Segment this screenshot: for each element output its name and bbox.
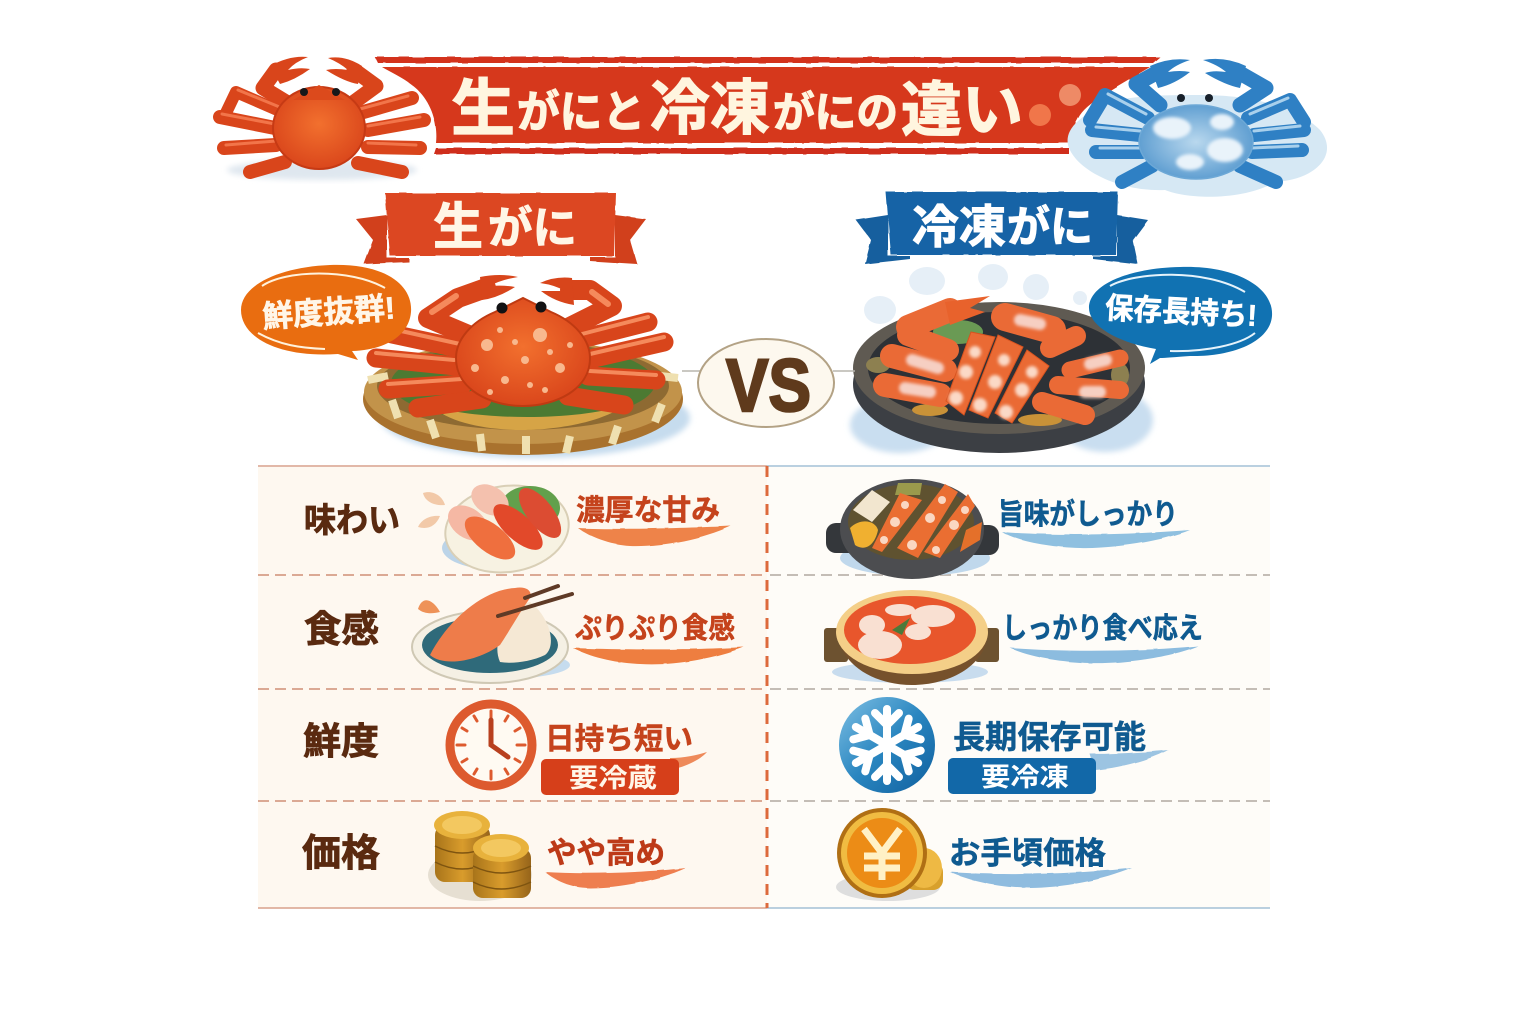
left ribbon heading bbox=[356, 193, 646, 264]
right column background bbox=[767, 467, 1270, 908]
dish handles bbox=[824, 628, 999, 662]
ribbon text bbox=[433, 199, 577, 255]
crab leg pieces bbox=[872, 484, 975, 558]
row 3 left value bbox=[541, 723, 707, 795]
value text: しっかり食べ応え bbox=[1002, 612, 1203, 645]
ribbon body bbox=[886, 192, 1118, 255]
bubble shape bbox=[241, 265, 411, 360]
yen symbol bbox=[864, 829, 900, 880]
plate shadow bbox=[850, 388, 1153, 453]
frost speckle bbox=[880, 496, 969, 554]
brush stroke bbox=[578, 526, 731, 546]
badge oval bbox=[698, 339, 834, 427]
row labels: 鮮度 bbox=[303, 721, 379, 762]
red crab legs and claws bbox=[220, 70, 424, 172]
value text: 濃厚な甘み bbox=[576, 494, 720, 527]
row 1 left: crab sashimi plate bbox=[418, 478, 574, 580]
value text: 旨味がしっかり bbox=[998, 497, 1178, 531]
back stack bbox=[434, 811, 490, 882]
ribbon text: がに bbox=[488, 204, 577, 253]
row 4 left: gold coin stacks bbox=[428, 811, 532, 901]
rice bbox=[497, 602, 551, 663]
white crab meat bbox=[858, 604, 955, 659]
tag text: 要冷蔵 bbox=[569, 763, 657, 793]
ribbon text: 生 bbox=[433, 199, 483, 255]
comparison table bbox=[258, 466, 1270, 908]
bubble shape bbox=[1089, 267, 1272, 364]
gratin surface bbox=[844, 596, 976, 664]
row labels: 価格 bbox=[302, 833, 380, 875]
row 1 right value bbox=[998, 497, 1190, 548]
tag text: 要冷凍 bbox=[981, 762, 1069, 792]
left column background bbox=[258, 467, 767, 908]
plate bbox=[412, 611, 568, 683]
red crab pincers bbox=[270, 57, 310, 84]
steam clouds bbox=[864, 264, 1087, 324]
title text: 生 bbox=[451, 75, 515, 144]
stone plate bbox=[853, 302, 1145, 453]
claw tips bbox=[945, 296, 990, 325]
frost blob bbox=[1068, 95, 1327, 197]
VS badge bbox=[682, 339, 855, 427]
snowflake arms bbox=[850, 709, 924, 781]
blue crab shell bbox=[1139, 105, 1253, 179]
pot handles bbox=[826, 523, 999, 555]
row 4 left value bbox=[545, 837, 686, 888]
claw pieces bbox=[885, 310, 1120, 415]
right hero: frozen crab on stone plate bbox=[850, 264, 1153, 453]
yen coin bbox=[837, 808, 927, 898]
herb garnish bbox=[892, 618, 910, 635]
row 4 right: yen coin icon bbox=[836, 808, 943, 901]
ribbon text: がに bbox=[1007, 204, 1093, 252]
plate glaze bbox=[422, 617, 558, 673]
plate shadow bbox=[442, 526, 554, 570]
banner ribbon bbox=[375, 57, 1160, 154]
crab meat bbox=[430, 587, 531, 662]
frost patches on legs bbox=[949, 346, 1038, 419]
frozen tag bbox=[948, 758, 1096, 794]
pot body bbox=[840, 479, 984, 579]
title text: 違い bbox=[901, 77, 1023, 144]
row 3 right: snowflake icon bbox=[839, 697, 935, 793]
green leaves and garnish bbox=[391, 343, 655, 423]
title text bbox=[451, 75, 1023, 144]
brush stroke bbox=[545, 868, 686, 888]
blue crab eyes bbox=[1177, 94, 1213, 102]
vegetables under the crab bbox=[866, 320, 1129, 426]
ribbon tails bbox=[356, 215, 646, 264]
red crab shadow bbox=[227, 160, 417, 180]
red crab shell bbox=[273, 87, 365, 169]
row labels bbox=[302, 502, 400, 875]
wooden side bbox=[838, 630, 988, 685]
coin shadow bbox=[836, 873, 940, 901]
clock ticks bbox=[457, 711, 525, 779]
icon: red crab bbox=[220, 57, 424, 180]
chopsticks bbox=[498, 586, 572, 616]
crab legs bbox=[376, 288, 664, 408]
refrigeration tag bbox=[541, 759, 679, 795]
table rules bbox=[258, 466, 1270, 908]
banner decoration dots bbox=[1029, 84, 1081, 126]
value text: やや高め bbox=[547, 837, 665, 870]
clock face bbox=[450, 704, 532, 786]
pot interior bbox=[848, 484, 974, 560]
icon: frozen blue crab bbox=[1068, 59, 1327, 197]
bamboo basket bbox=[363, 340, 683, 455]
VS text: VS bbox=[726, 344, 811, 427]
row 4 right value bbox=[949, 836, 1132, 888]
callout: freshness speech bubble bbox=[241, 265, 411, 360]
golden bed bbox=[430, 405, 625, 430]
brush stroke bbox=[670, 752, 707, 770]
brush stroke bbox=[1090, 750, 1168, 770]
value text: 長期保存可能 bbox=[953, 719, 1146, 755]
snowflake disc bbox=[839, 697, 935, 793]
shell speckles bbox=[471, 327, 573, 395]
pot shadow bbox=[840, 540, 990, 576]
blue crab pincers bbox=[1150, 59, 1190, 88]
brush stroke bbox=[1010, 646, 1198, 663]
brush stroke bbox=[950, 868, 1132, 888]
blue crab legs and claws bbox=[1090, 72, 1304, 182]
value text: お手頃価格 bbox=[949, 836, 1106, 871]
front stack bbox=[473, 834, 531, 898]
crab slices bbox=[441, 478, 569, 568]
callout: long storage speech bubble bbox=[1089, 267, 1272, 364]
bubble highlights bbox=[1110, 275, 1255, 351]
red crab head ridge bbox=[293, 85, 345, 100]
ribbon tails bbox=[856, 215, 1148, 264]
crab pincers bbox=[480, 275, 518, 300]
row 2 right: gratin in wooden dish bbox=[824, 590, 999, 685]
coin shadow bbox=[428, 849, 532, 901]
value text: ぷりぷり食感 bbox=[575, 612, 735, 645]
basket shadow bbox=[380, 378, 690, 458]
frost patches bbox=[1153, 114, 1243, 170]
title text: がにの bbox=[773, 89, 898, 136]
splash marks bbox=[418, 492, 445, 528]
small back coin bbox=[905, 848, 943, 890]
row 2 right value bbox=[1002, 612, 1203, 663]
bubble text: 保存長持ち! bbox=[1104, 292, 1258, 333]
row labels: 味わい bbox=[304, 502, 400, 540]
bubble text: 鮮度抜群! bbox=[261, 290, 396, 335]
brush stroke bbox=[1002, 530, 1190, 548]
bubble highlights bbox=[258, 274, 385, 349]
title text: がにと bbox=[517, 88, 645, 137]
plate shadow bbox=[430, 651, 570, 679]
right ribbon heading bbox=[856, 192, 1148, 264]
title banner bbox=[375, 57, 1160, 154]
ribbon body bbox=[385, 193, 616, 256]
red crab eyes bbox=[300, 88, 340, 96]
value text: 日持ち短い bbox=[545, 723, 693, 756]
connector lines bbox=[682, 370, 855, 372]
row 3 right value bbox=[948, 719, 1168, 794]
ribbon text: 冷凍 bbox=[912, 201, 1006, 253]
row labels: 食感 bbox=[304, 609, 379, 650]
crab eyes bbox=[496, 302, 546, 314]
plate bbox=[440, 478, 574, 580]
dish shadow bbox=[832, 661, 988, 683]
ribbon text bbox=[912, 201, 1093, 253]
title text: 冷凍 bbox=[650, 75, 770, 142]
brush stroke bbox=[573, 647, 744, 664]
row 1 right: stone pot with crab legs bbox=[826, 479, 999, 579]
tofu and vegetables bbox=[850, 483, 982, 552]
row 1 left value bbox=[576, 494, 731, 546]
row 3 left: clock icon bbox=[450, 704, 532, 786]
row 2 left: crab with chopsticks and rice bbox=[412, 586, 572, 683]
dish rim bbox=[836, 590, 988, 674]
row 2 left value bbox=[573, 612, 744, 664]
splash mark bbox=[418, 600, 440, 613]
three leg pieces bbox=[946, 332, 1049, 423]
clock hands bbox=[491, 720, 508, 757]
left hero: crab on bamboo basket bbox=[363, 275, 690, 458]
crab shell bbox=[456, 298, 590, 406]
lettuce bbox=[500, 486, 560, 530]
